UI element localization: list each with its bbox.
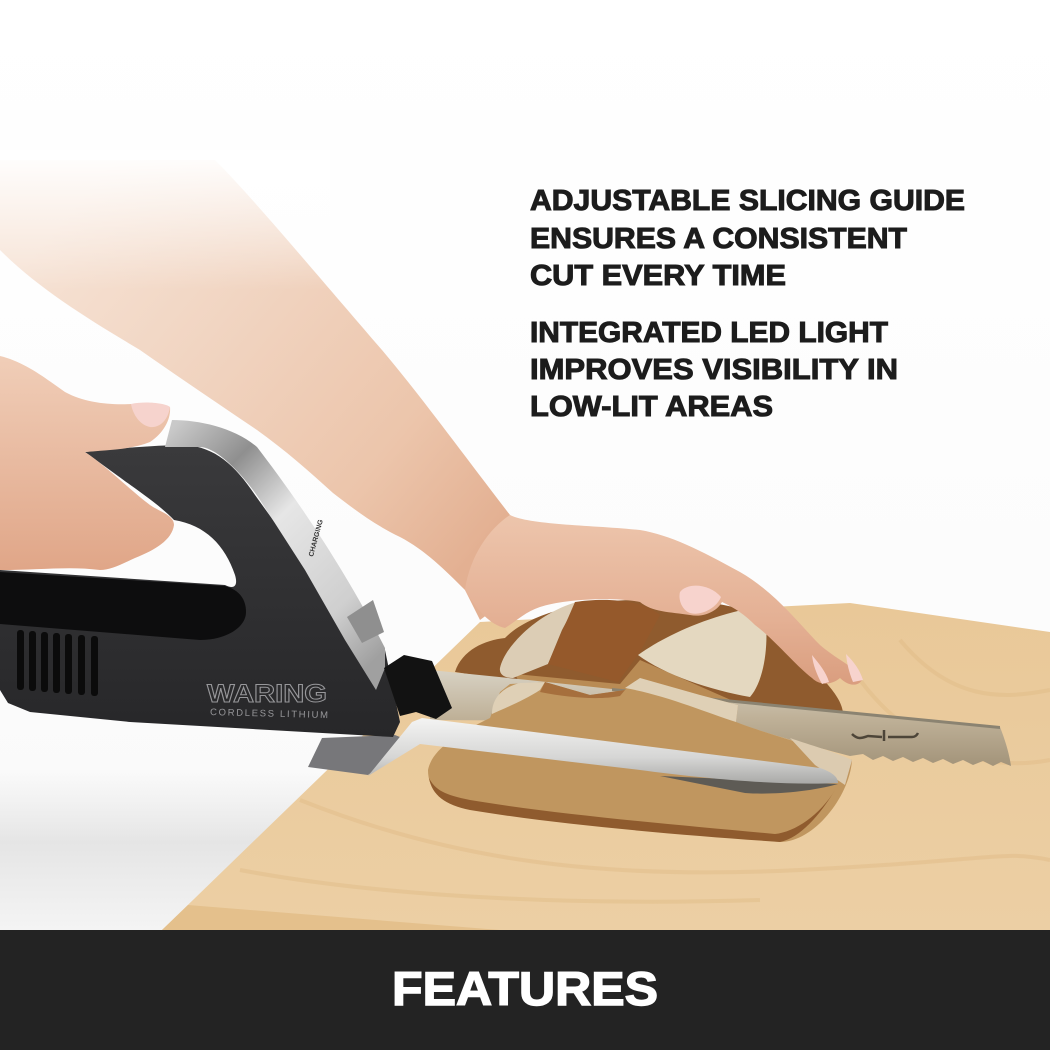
bread loaf bbox=[455, 600, 843, 712]
glossy grip bbox=[0, 572, 246, 640]
knife handle and motor housing bbox=[0, 445, 400, 737]
feature 2: IMPROVES VISIBILITY IN bbox=[530, 354, 898, 386]
feature text bbox=[530, 185, 965, 423]
release button bbox=[347, 600, 384, 643]
feature 1: ENSURES A CONSISTENT bbox=[530, 223, 907, 255]
blade adjustment slot bbox=[852, 730, 918, 741]
feature 1: ADJUSTABLE SLICING GUIDE bbox=[530, 185, 965, 217]
serrated blade bbox=[430, 670, 1011, 766]
table shadow bbox=[0, 770, 360, 930]
hand on handle bbox=[0, 356, 174, 570]
vents bbox=[17, 630, 98, 696]
feature 2 bbox=[530, 317, 898, 423]
electric knife body bbox=[0, 420, 452, 737]
lower bread slice bbox=[428, 678, 852, 842]
feature 1 bbox=[530, 185, 965, 292]
feature 2: LOW-LIT AREAS bbox=[530, 391, 773, 423]
fingernail bbox=[679, 586, 721, 614]
brand subtitle: CORDLESS LITHIUM bbox=[210, 707, 328, 721]
blade connector bbox=[384, 655, 452, 719]
upper bread dome bbox=[455, 600, 843, 712]
feature 2: INTEGRATED LED LIGHT bbox=[530, 317, 888, 349]
cutting board bbox=[162, 603, 1050, 930]
hand on bread bbox=[465, 515, 863, 685]
fingernail bbox=[131, 403, 170, 427]
footer heading: FEATURES bbox=[392, 962, 658, 1015]
footer bar bbox=[0, 930, 1050, 1050]
feature 1: CUT EVERY TIME bbox=[530, 260, 786, 292]
brand logo: WARING bbox=[207, 680, 327, 708]
stainless top panel bbox=[165, 420, 385, 690]
arm bbox=[0, 150, 560, 620]
fingertip nails bbox=[812, 654, 863, 684]
slicing guide blade bbox=[308, 718, 838, 794]
charging indicator label: CHARGING bbox=[308, 518, 325, 558]
